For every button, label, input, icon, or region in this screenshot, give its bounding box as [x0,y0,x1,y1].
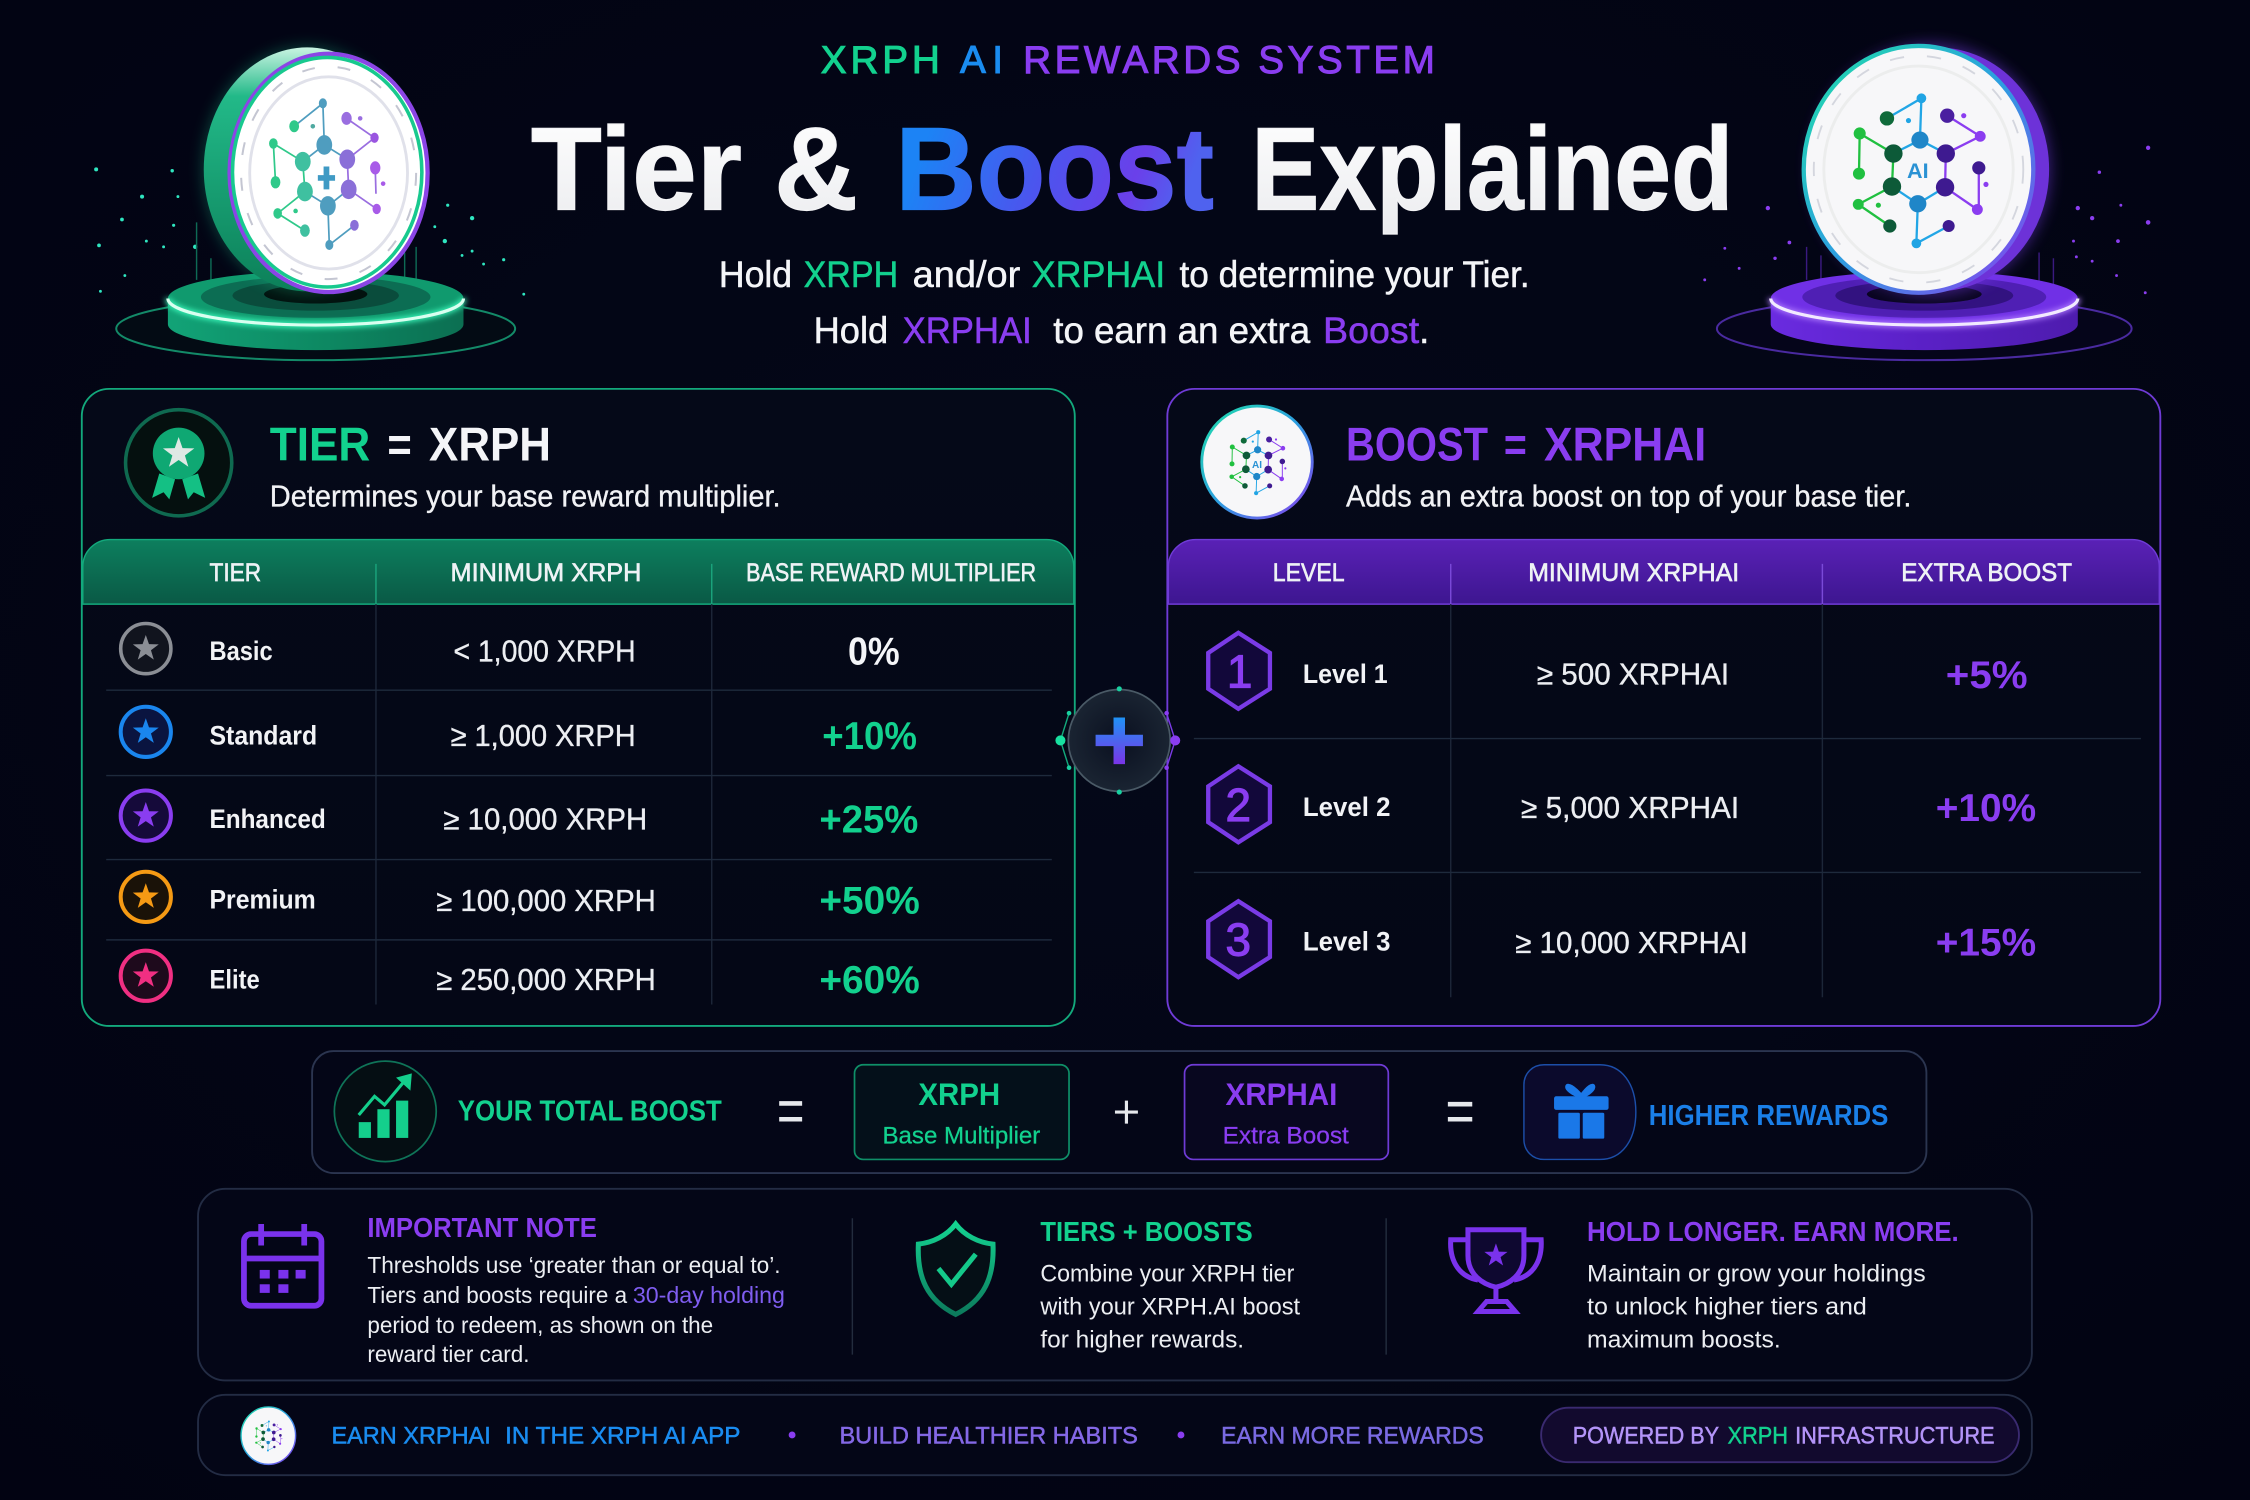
eyebrow heading: REWARDS SYSTEM [1023,39,1435,82]
icon: growth chart [334,1061,436,1162]
row: Level 1: ≥ 500 XRPHAI [1537,658,1729,691]
plus connector [1055,686,1180,795]
text: thresholds [367,1252,785,1367]
badge: powered by: POWERED BY [1573,1423,1719,1450]
outer ring [116,297,515,360]
total boost formula bar [312,1051,1926,1173]
subtitle [719,254,1530,351]
row: Level 2: Level 2 [1303,791,1390,822]
coin [1804,43,2051,296]
text: thresholds: period to redeem, as shown on the [367,1312,713,1338]
row: Basic: < 1,000 XRPH [453,636,636,669]
row: Level 2: 2 [1225,779,1251,831]
text: combine: for higher rewards. [1040,1326,1244,1353]
row: Level 2 [1208,766,2036,842]
row: Enhanced: Enhanced [210,803,326,834]
boost heading: XRPHAI [1544,419,1706,472]
badge: powered by: INFRASTRUCTURE [1795,1423,1995,1450]
subtitle: XRPHAI [1032,254,1165,295]
text: maintain [1587,1260,1926,1353]
note: hold longer [1451,1216,1959,1353]
particles: right [1703,146,2150,294]
subtitle: and/or [913,254,1020,295]
row: Standard: +10% [822,715,917,758]
box: XRPH base multiplier: Base Multiplier [882,1123,1040,1150]
right coin on purple platform [1703,43,2150,360]
panel: boost [1167,389,2160,1026]
tier description: Determines your base reward multiplier. [270,479,781,514]
text: combine [1039,1260,1300,1353]
row: Elite [121,951,920,1002]
row: Level 2: +10% [1936,787,2036,830]
platform [168,271,463,350]
network icon [1853,93,1989,248]
row: Level 3: +15% [1936,922,2036,965]
row: Level 1: 1 [1227,645,1252,697]
icon: trophy [1451,1230,1541,1312]
row: Premium [121,872,920,922]
footer bar [198,1395,2032,1475]
box: XRPHAI extra boost: Extra Boost [1223,1123,1349,1150]
heading: hold longer: HOLD LONGER. EARN MORE. [1587,1216,1959,1247]
row: Elite: +60% [819,959,920,1002]
row: Standard: Standard [210,720,317,751]
subtitle: XRPH [804,254,898,295]
tier heading: XRPH [429,419,551,472]
platform [1771,271,2078,350]
row: Level 1: +5% [1946,654,2028,697]
boost heading [1346,419,1706,472]
table header: boost: LEVEL [1273,559,1345,587]
row: Standard: ≥ 1,000 XRPH [451,720,636,753]
footer message: habits: BUILD HEALTHIER HABITS [839,1423,1138,1450]
row: Elite: ≥ 250,000 XRPH [436,964,656,997]
row: Level 3 [1208,901,2036,977]
left coin on green platform [94,46,525,360]
outer ring [1717,297,2132,360]
row: Enhanced [121,791,918,841]
subtitle: XRPHAI [903,310,1032,351]
icon: footer coin [241,1407,296,1464]
row: Level 1 [1208,633,2028,709]
box: XRPHAI extra boost: XRPHAI [1225,1076,1337,1112]
eyebrow heading: XRPH [821,39,940,82]
box: XRPHAI extra boost [1185,1065,1388,1159]
heading: tiers + boosts: TIERS + BOOSTS [1040,1216,1253,1247]
row: Basic: Basic [210,635,273,666]
title: Tier & [531,103,858,235]
subtitle: to earn an extra [1053,310,1311,351]
row: Enhanced: +25% [819,798,918,841]
eyebrow heading [821,39,1435,82]
row: Level 3: Level 3 [1303,926,1390,957]
footer message: earn: EARN XRPHAI [331,1423,491,1450]
row: Level 1: Level 1 [1303,658,1388,689]
table header: boost: EXTRA BOOST [1901,559,2072,587]
equals sign [1448,1104,1472,1119]
icon: shield [918,1224,993,1314]
row: Level 3: ≥ 10,000 XRPHAI [1515,927,1748,960]
row: Premium: +50% [819,879,920,922]
equals sign [779,1103,802,1119]
network icon [269,98,385,250]
coin AI label: AI [1907,159,1929,183]
text: thresholds: Tiers and boosts require a [367,1282,627,1308]
footer message: earn: IN THE XRPH AI APP [505,1423,740,1450]
boost heading: = [1504,419,1527,472]
icon: calendar [244,1224,321,1306]
icon: medal [126,410,232,516]
subtitle: to determine your Tier. [1180,254,1530,295]
label: higher rewards: HIGHER REWARDS [1649,1100,1888,1132]
table header: tier: MINIMUM XRPH [451,559,641,587]
table header: boost: MINIMUM XRPHAI [1528,559,1739,587]
label: your total boost: YOUR TOTAL BOOST [458,1096,722,1128]
boost heading: BOOST [1346,419,1488,472]
badge: powered by: XRPH [1728,1423,1788,1450]
text: combine: Combine your XRPH tier [1040,1260,1294,1287]
tier heading: TIER [270,419,370,472]
row: Basic [121,623,900,674]
text: thresholds: 30-day holding [633,1282,785,1308]
text: maintain: to unlock higher tiers and [1587,1293,1867,1320]
tier heading: = [387,419,412,472]
table header: boost [1168,540,2159,604]
row: Basic: 0% [848,630,900,673]
text: combine: with your XRPH.AI boost [1039,1293,1300,1320]
eyebrow heading: AI [960,39,1003,82]
title [531,103,1733,235]
particles: left [94,167,525,296]
box: XRPH base multiplier [855,1065,1069,1159]
note: tiers and boosts [918,1216,1300,1353]
row: Level 3: 3 [1225,914,1251,966]
coin [202,46,428,293]
text: maintain: maximum boosts. [1587,1326,1781,1353]
panel: tier [82,389,1075,1026]
heading: important note: IMPORTANT NOTE [367,1212,597,1243]
icon: gift [1524,1065,1636,1159]
plus sign [1115,1101,1138,1124]
table header: tier: BASE REWARD MULTIPLIER [746,559,1036,587]
text: thresholds: reward tier card. [367,1341,529,1367]
tier heading [270,419,551,472]
footer message: rewards: EARN MORE REWARDS [1221,1423,1484,1450]
title: Explained [1251,103,1733,235]
text: maintain: Maintain or grow your holdings [1587,1260,1926,1287]
panel: notes [198,1189,2032,1380]
row: Enhanced: ≥ 10,000 XRPH [443,803,647,836]
text: thresholds: Thresholds use ‘greater than or equal to’. [367,1252,781,1278]
boost description: Adds an extra boost on top of your base tier. [1346,479,1911,514]
icon: boost coin: AI [1252,460,1262,471]
table header: tier [83,540,1074,604]
badge: powered by [1541,1408,2019,1462]
row: Level 2: ≥ 5,000 XRPHAI [1521,792,1739,825]
row: Premium: Premium [210,883,316,914]
note: important [244,1212,785,1367]
box: XRPH base multiplier: XRPH [918,1076,1000,1112]
subtitle: . [1419,310,1429,351]
subtitle: Hold [814,310,888,351]
title: Boost [895,103,1214,235]
footer message: earn [331,1423,740,1450]
row: Premium: ≥ 100,000 XRPH [436,885,656,918]
subtitle: Boost [1323,310,1419,351]
table header: tier: TIER [210,559,261,587]
row: Elite: Elite [210,964,260,995]
row: Standard [121,707,917,758]
subtitle: Hold [719,254,792,295]
icon: boost coin [1202,406,1312,518]
